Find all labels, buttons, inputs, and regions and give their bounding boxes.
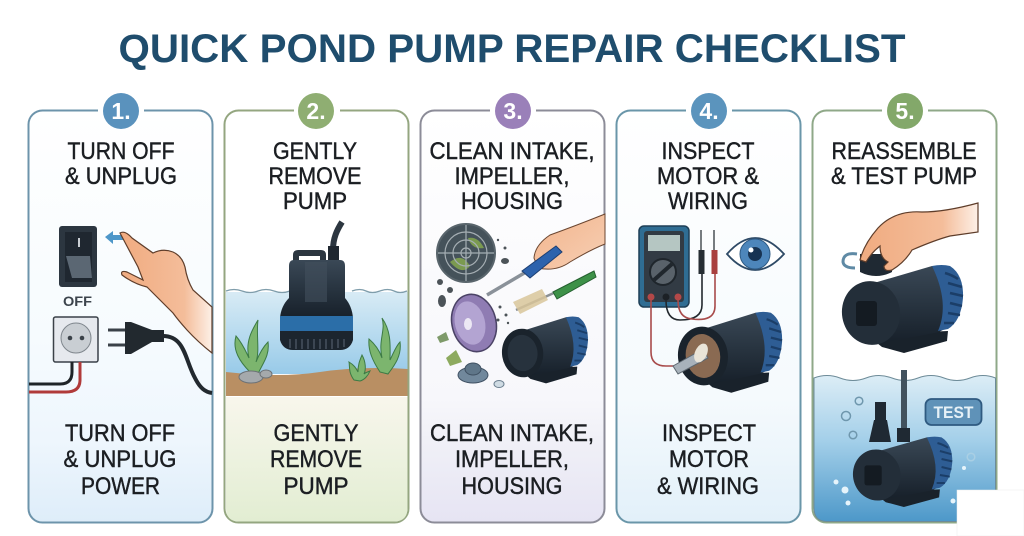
heading: step 5: [831, 138, 977, 190]
panel: step 5: [812, 93, 996, 522]
heading: step 3: [430, 138, 594, 215]
text: step 1 label: & UNPLUG: [64, 446, 176, 473]
icon: clogged intake grille: [437, 224, 495, 282]
heading: step 1: [65, 138, 177, 190]
panel: step 4: [616, 93, 800, 522]
icon: wall socket: [54, 317, 98, 362]
heading: step 4: INSPECT: [662, 138, 755, 165]
badge: step 2: 2.: [306, 98, 326, 124]
icon: impeller: [446, 290, 502, 356]
text: step 2 label: [270, 420, 362, 500]
text: step 3 label: [430, 420, 594, 500]
icon: submersible pump: [280, 222, 353, 350]
icon: hand tightening cap: [860, 203, 978, 270]
badge: step 3: 3.: [503, 98, 523, 124]
badge: test: TEST: [934, 403, 974, 422]
label: off: OFF: [63, 293, 92, 309]
text: step 2 label: REMOVE: [270, 446, 362, 473]
icon: cleaning brush: [513, 271, 596, 314]
text: step 2 label: GENTLY: [274, 420, 358, 447]
heading: step 4: [657, 138, 759, 215]
icon: rocker switch: [59, 226, 97, 287]
badge: test: [926, 399, 982, 425]
text: step 4 label: MOTOR: [669, 446, 749, 473]
icon: open motor: [673, 312, 782, 393]
icon: plug and cable: [108, 322, 212, 393]
icon: test leads and probes: [651, 230, 718, 366]
badge: step 1: 1.: [111, 98, 131, 124]
icon: small cap: [458, 363, 504, 388]
icon: pump on bench: [837, 254, 963, 353]
illustration: test water: [814, 376, 996, 522]
heading: step 3: HOUSING: [461, 188, 563, 215]
heading: step 1: & UNPLUG: [65, 163, 177, 190]
text: step 1 label: TURN OFF: [65, 420, 175, 447]
icon: eye: [727, 238, 784, 270]
icon: multimeter: [639, 226, 689, 307]
text: step 1 label: POWER: [81, 473, 160, 500]
panel: step 2: [224, 93, 408, 522]
white corner patch: [957, 490, 1024, 536]
heading: step 2: REMOVE: [268, 163, 362, 190]
icon: hand with screwdriver: [487, 214, 605, 295]
badge: step 2: [298, 93, 334, 129]
heading: step 1: TURN OFF: [68, 138, 174, 165]
badge: step 3: [495, 93, 531, 129]
icon: debris: [437, 239, 509, 366]
heading: step 4: MOTOR &: [657, 163, 759, 190]
badge: step 4: 4.: [699, 98, 719, 124]
panel: step 1: [28, 93, 212, 522]
panel: step 3: [420, 93, 605, 522]
icon: aquatic plants and stones: [235, 318, 400, 383]
title: QUICK POND PUMP REPAIR CHECKLIST: [118, 27, 906, 71]
text: step 3 label: HOUSING: [462, 473, 562, 500]
text: step 4 label: INSPECT: [662, 420, 756, 447]
icon: hand pressing switch: [120, 232, 212, 353]
heading: step 2: PUMP: [283, 188, 347, 215]
text: step 2 label: PUMP: [284, 473, 348, 500]
badge: step 5: [887, 93, 923, 129]
text: step 3 label: IMPELLER,: [455, 446, 569, 473]
text: step 1 label: [64, 420, 176, 500]
heading: step 3: IMPELLER,: [454, 163, 570, 190]
heading: step 4: WIRING: [668, 188, 748, 215]
heading: step 2: [268, 138, 362, 215]
icon: house wires: [29, 362, 80, 392]
text: step 3 label: CLEAN INTAKE,: [430, 420, 594, 447]
heading: step 3: CLEAN INTAKE,: [430, 138, 594, 165]
icon: rotate arrow: [843, 254, 857, 268]
badge: step 1: [103, 93, 139, 129]
icon: pump housing: [498, 317, 588, 383]
heading: step 2: GENTLY: [273, 138, 357, 165]
badge: step 5: 5.: [895, 98, 915, 124]
heading: step 5: & TEST PUMP: [831, 163, 977, 190]
illustration: pond water: [226, 290, 408, 396]
heading: step 5: REASSEMBLE: [832, 138, 976, 165]
text: step 4 label: [657, 420, 759, 500]
text: step 4 label: & WIRING: [657, 473, 759, 500]
icon: arrow: [105, 231, 124, 244]
icon: submerged pump: [849, 370, 952, 507]
badge: step 4: [691, 93, 727, 129]
icon: bubbles: [834, 397, 975, 506]
